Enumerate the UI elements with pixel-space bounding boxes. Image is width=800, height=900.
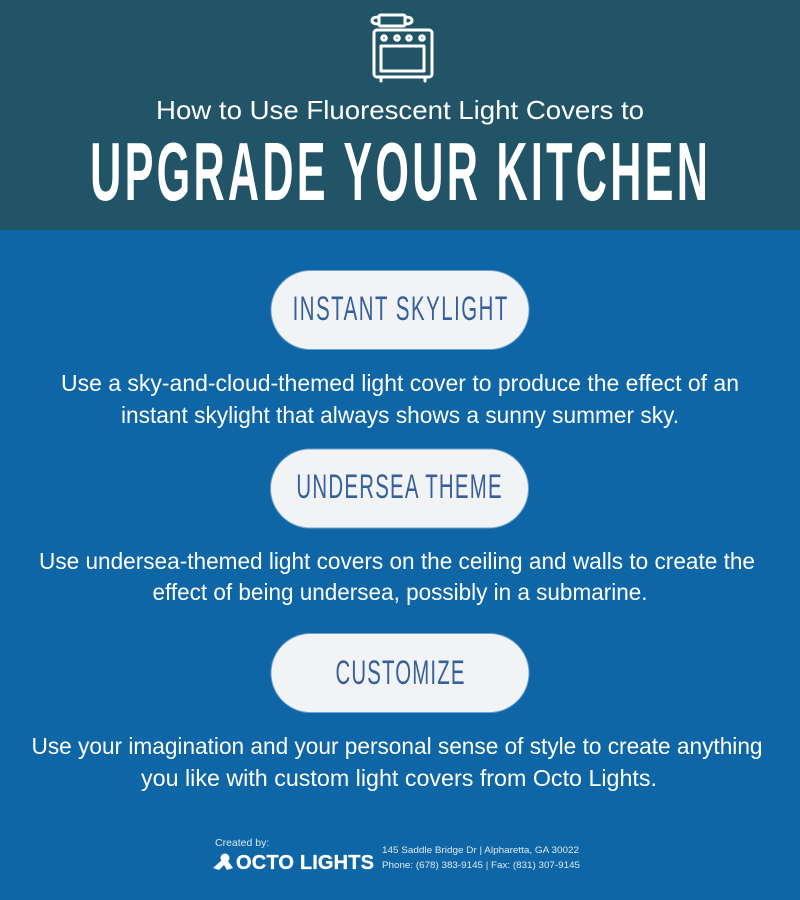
panel: instant skylight <box>61 270 739 428</box>
title: UPGRADE YOUR KITCHEN <box>90 126 708 219</box>
pill: customize: CUSTOMIZE <box>335 654 465 691</box>
text: undersea theme description: Use undersea-themed light covers on the ceiling and walls to create the <box>39 548 755 574</box>
text: customize description: you like with custom light covers from Octo Lights. <box>141 765 657 791</box>
text: instant skylight description <box>61 370 739 428</box>
pill: customize <box>271 634 529 712</box>
icon: octopus logo <box>213 854 233 870</box>
text: undersea theme description <box>39 548 755 605</box>
pill: instant skylight: INSTANT SKYLIGHT <box>293 290 507 327</box>
subtitle: How to Use Fluorescent Light Covers to <box>156 95 644 125</box>
address: 145 Saddle Bridge Dr | Alpharetta, GA 30022 <box>382 845 579 856</box>
panel: undersea theme <box>39 449 755 605</box>
footer <box>213 837 580 874</box>
header band <box>0 0 800 230</box>
text: customize description <box>32 733 762 791</box>
pill: instant skylight <box>271 270 529 350</box>
pill: undersea theme: UNDERSEA THEME <box>296 468 502 505</box>
logo wordmark: OCTO LIGHTS <box>236 852 374 874</box>
icon: stove with pot <box>372 15 432 81</box>
text: instant skylight description: instant skylight that always shows a sunny summer sky. <box>121 402 679 428</box>
pill: undersea theme <box>270 449 528 528</box>
text: undersea theme description: effect of being undersea, possibly in a submarine. <box>152 579 648 605</box>
text: instant skylight description: Use a sky-and-cloud-themed light cover to produce the effect of an <box>61 370 739 396</box>
text: customize description: Use your imagination and your personal sense of style to create anything <box>32 733 762 759</box>
panel: customize <box>32 634 762 791</box>
created by label: Created by: <box>215 837 269 849</box>
phone and fax: Phone: (678) 383-9145 | Fax: (831) 307-9145 <box>382 860 580 871</box>
